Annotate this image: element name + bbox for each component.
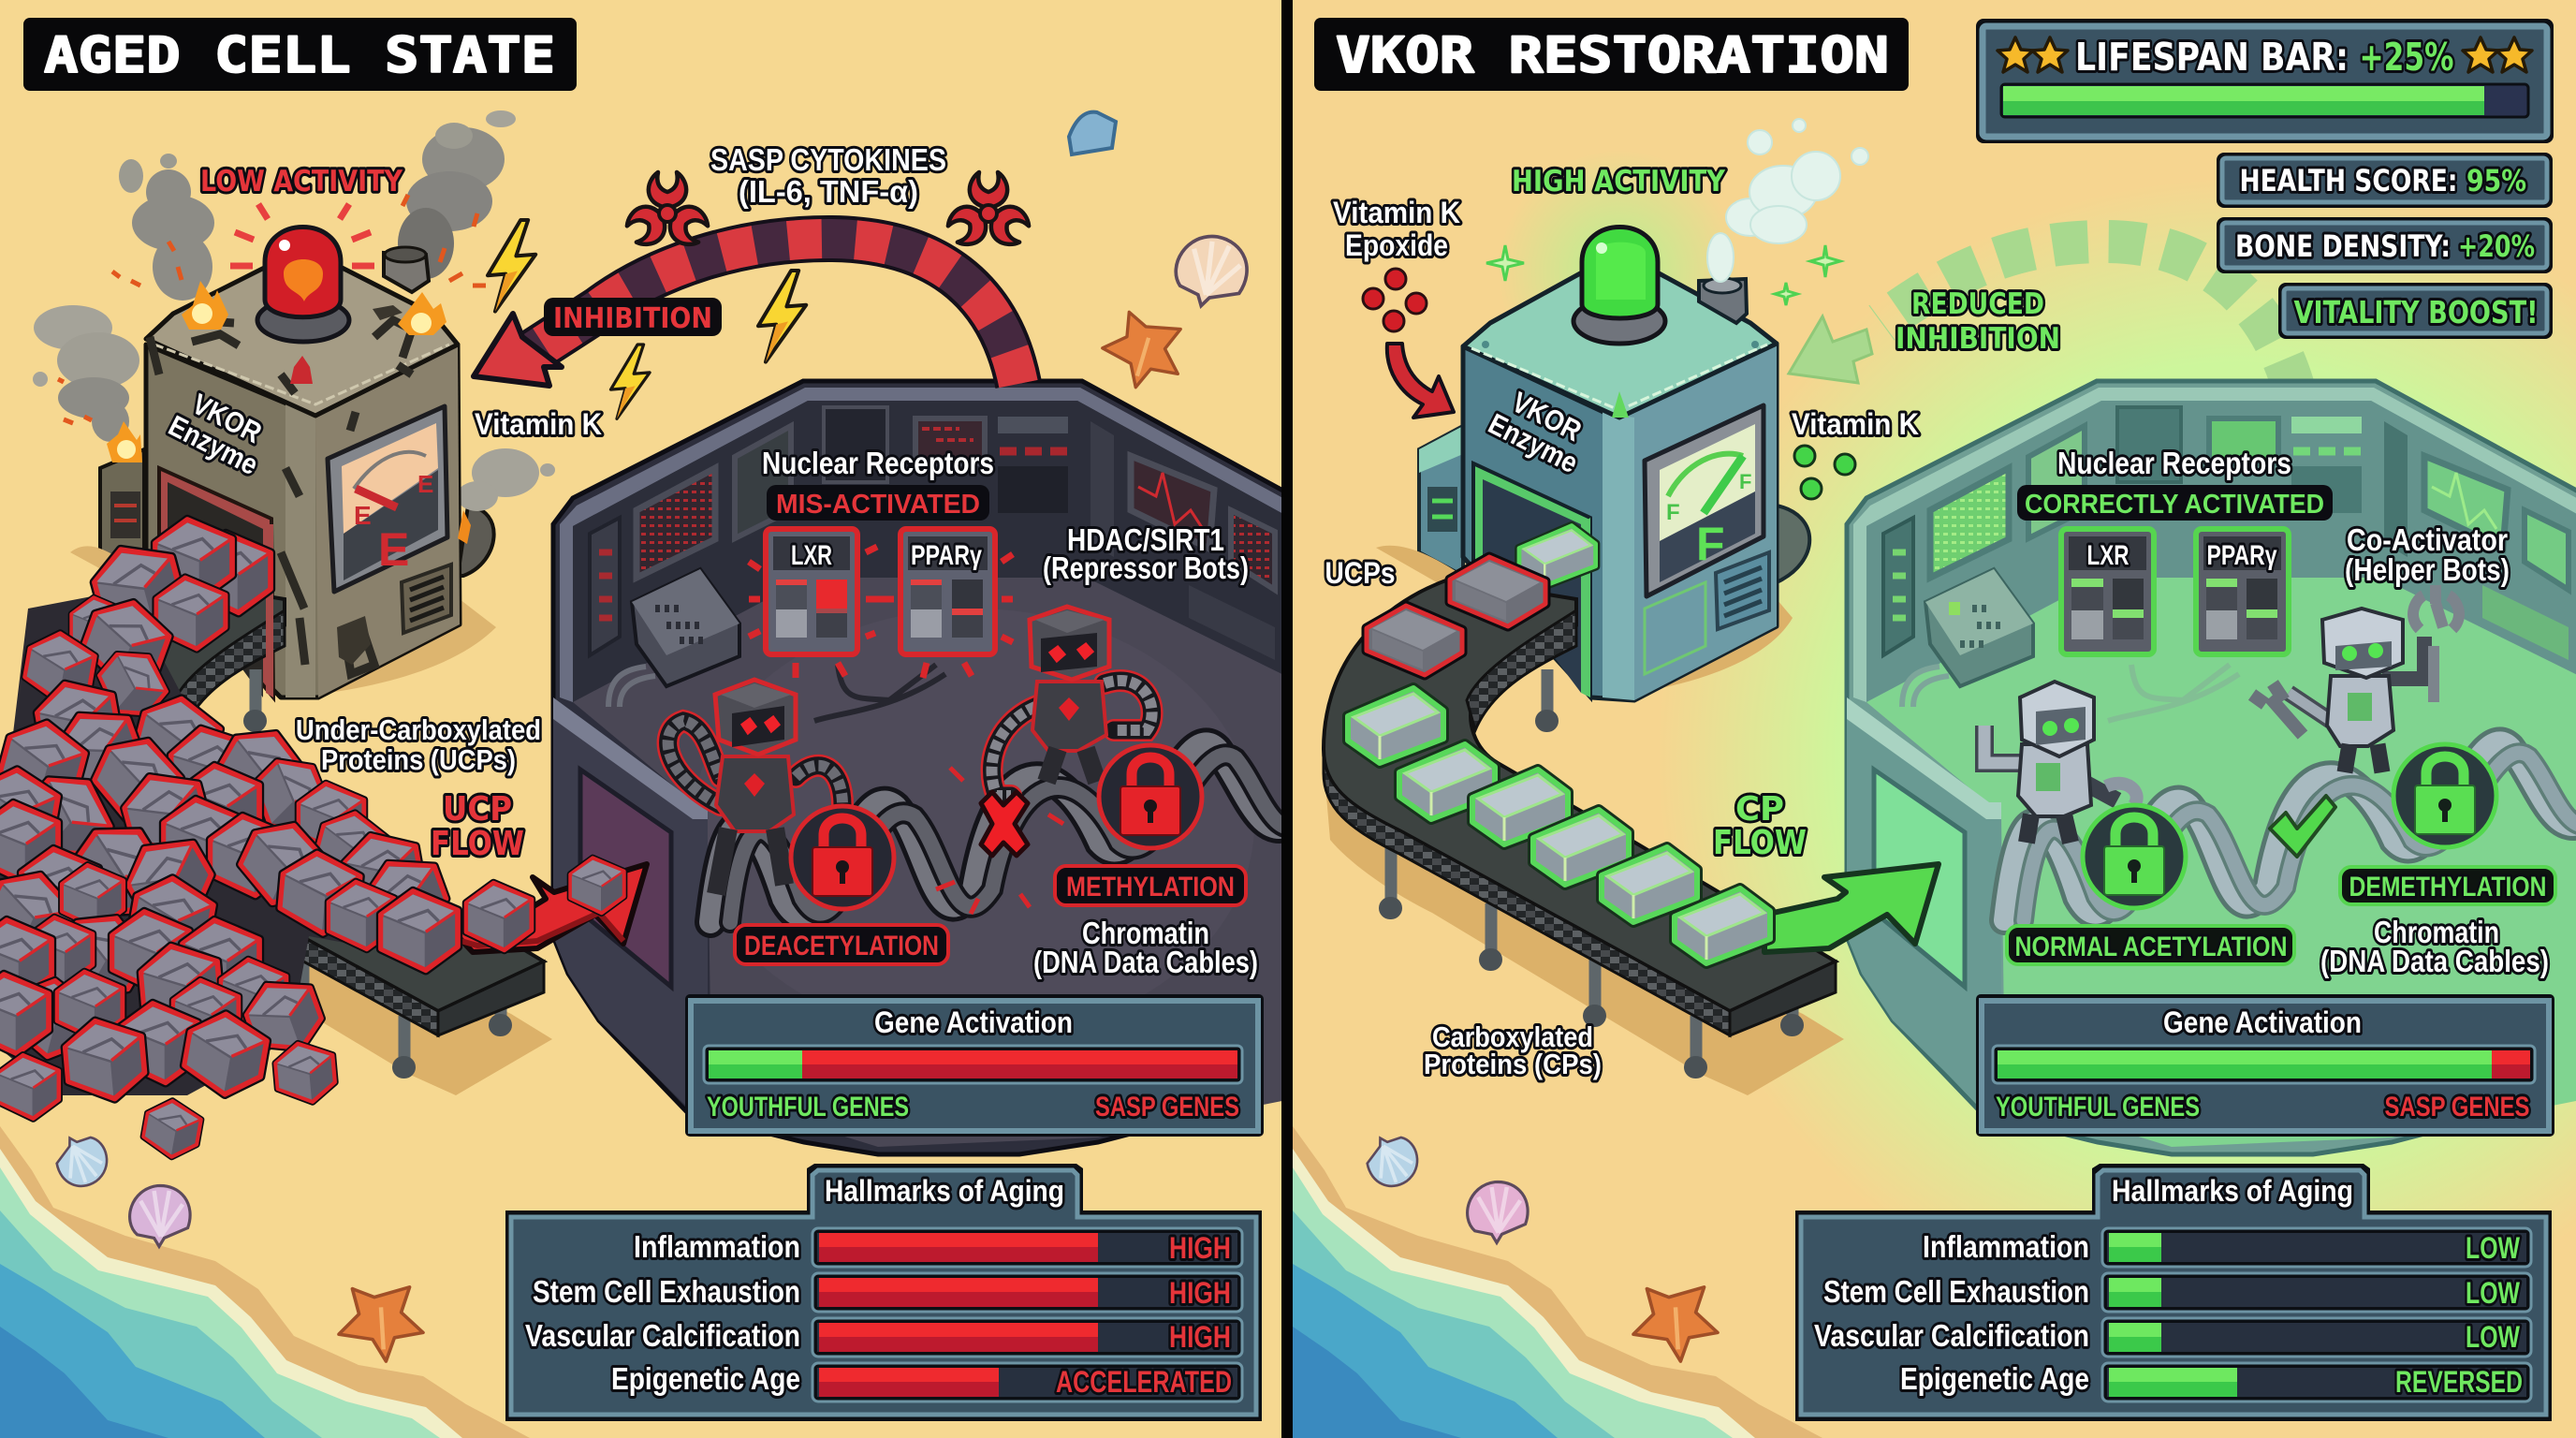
label: HDAC/SIRT1: (Repressor Bots) — [1043, 550, 1249, 585]
icon: check mark — [2270, 796, 2335, 857]
conveyor aged — [32, 579, 552, 1095]
label: reduced inhibition: INHIBITION — [1895, 322, 2060, 356]
stack on aged machine — [384, 247, 429, 292]
helper bot left — [1984, 682, 2137, 843]
label: SASP genes: SASP GENES — [2385, 1092, 2529, 1123]
label: CP flow — [1713, 790, 1807, 862]
icon: lightning 1 — [488, 220, 535, 312]
label: gene activation: Gene Activation — [874, 1005, 1073, 1039]
row: inflammation — [634, 1228, 1242, 1267]
divider — [1281, 0, 1293, 1438]
panel: hallmarks healthy — [1795, 1164, 2552, 1421]
badge: methylation — [1055, 866, 1246, 905]
shoreline left — [0, 1126, 530, 1438]
row: stem cell exhaustion: HIGH — [1169, 1276, 1231, 1310]
beacon glow — [1488, 140, 1750, 403]
vent — [1716, 552, 1769, 629]
gauge — [328, 406, 447, 592]
label: vitamin K epoxide: Vitamin K — [1333, 196, 1460, 229]
badge: mis-activated: MIS-ACTIVATED — [776, 490, 980, 520]
label: PPARy: PPARγ — [911, 540, 982, 571]
label: VKOR enzyme: Enzyme — [164, 409, 263, 481]
label: hallmarks title: Hallmarks of Aging — [825, 1174, 1064, 1208]
label: chromatin: (DNA Data Cables) — [1033, 945, 1258, 979]
panel: aged cell room — [553, 381, 1310, 1154]
panel: health score: HEALTH SCORE: — [2239, 163, 2458, 198]
row: stem cell exhaustion: Stem Cell Exhaustion — [533, 1274, 800, 1309]
label: LXR: LXR — [2087, 540, 2130, 571]
icon: beacon red — [230, 204, 374, 342]
arrow: CP flow — [1764, 864, 1939, 952]
label: vitamin K epoxide: Epoxide — [1345, 228, 1448, 262]
label: co-activator: (Helper Bots) — [2345, 552, 2510, 587]
label: carboxylated proteins — [1424, 1020, 1602, 1080]
wall screens — [590, 407, 1275, 660]
label: lifespan bar: LIFESPAN BAR: — [2075, 35, 2349, 80]
icon: starfish right — [1633, 1287, 1718, 1361]
machine: healthy VKOR enzyme: F — [1696, 518, 1725, 570]
row: inflammation: HIGH — [1169, 1231, 1231, 1265]
icon: pink shell right — [1468, 1181, 1528, 1242]
icon: epoxide dots — [1363, 269, 1427, 331]
row: vascular calcification: Vascular Calcification — [1814, 1318, 2089, 1353]
carboxylated box — [1675, 888, 1770, 963]
label: VKOR enzyme right: VKOR — [1507, 386, 1587, 448]
label: high activity: HIGH ACTIVITY — [1512, 165, 1725, 198]
machine: aged VKOR enzyme: E — [378, 523, 409, 576]
machine: aged VKOR enzyme — [146, 248, 460, 697]
label: VKOR enzyme: VKOR — [187, 388, 267, 449]
label: CP flow: CP — [1735, 790, 1784, 829]
title: aged cell state: AGED CELL STATE — [44, 27, 555, 84]
arrow: reduced inhibition dashed arc — [1789, 242, 2295, 393]
row: vascular calcification: HIGH — [1169, 1320, 1231, 1354]
icon: biohazard left — [622, 172, 712, 250]
badge: normal acetylation: NORMAL ACETYLATION — [2014, 932, 2288, 962]
label: UCP flow: UCP — [443, 790, 512, 829]
label: youthful genes: YOUTHFUL GENES — [707, 1092, 909, 1123]
smoke aged machine — [33, 110, 555, 511]
row: epigenetic age: REVERSED — [2395, 1365, 2523, 1399]
badge: inhibition: INHIBITION — [553, 302, 712, 335]
title: aged cell state — [23, 18, 577, 91]
label: reduced inhibition: REDUCED — [1911, 287, 2044, 321]
label: HDAC/SIRT1 — [1043, 522, 1249, 585]
label: chromatin right — [2320, 915, 2549, 978]
front wall with screen — [1847, 697, 2001, 1112]
icon: lightning 3 — [610, 345, 650, 418]
badge: correctly activated: CORRECTLY ACTIVATED — [2025, 490, 2324, 520]
shoreline right — [1293, 1126, 1822, 1438]
label: reduced inhibition — [1895, 287, 2060, 356]
icon: beacon green — [1573, 227, 1665, 344]
switch LXR healthy — [2061, 529, 2154, 654]
machine: healthy VKOR enzyme: F — [1739, 470, 1751, 493]
arrow: SASP cytokine inhibition — [474, 239, 1018, 386]
machine: aged VKOR enzyme: E — [417, 470, 433, 498]
row: epigenetic age — [1900, 1361, 2531, 1401]
repressor bot right — [992, 607, 1152, 796]
panel: bone density — [2217, 217, 2553, 273]
label: SASP cytokines — [710, 142, 946, 209]
panel: VKOR restoration background — [1281, 0, 2576, 1438]
label: under-carboxylated proteins — [296, 713, 541, 776]
label: under-carboxylated proteins: Proteins (UCPs) — [321, 743, 516, 776]
stack healthy — [1699, 278, 1747, 323]
panel: bone density: +20% — [2458, 228, 2535, 264]
row: inflammation: LOW — [2466, 1231, 2521, 1265]
label: gene activation: Gene Activation — [2163, 1005, 2362, 1039]
label: chromatin right: Chromatin — [2374, 915, 2499, 949]
gauge — [1645, 405, 1764, 596]
label: carboxylated proteins: Proteins (CPs) — [1424, 1048, 1602, 1080]
label: youthful genes: YOUTHFUL GENES — [1996, 1092, 2200, 1123]
door — [159, 468, 273, 697]
row: epigenetic age: ACCELERATED — [1056, 1365, 1232, 1399]
icon: lock normal acetylation — [2083, 805, 2186, 908]
row: epigenetic age: Epigenetic Age — [611, 1361, 800, 1396]
panel: gene activation aged — [685, 994, 1264, 1137]
vent — [402, 565, 451, 633]
label: UCPs: UCPs — [1325, 556, 1395, 590]
row: stem cell exhaustion: Stem Cell Exhaustion — [1823, 1274, 2089, 1309]
icon: pink shell — [130, 1185, 190, 1246]
row: vascular calcification: Vascular Calcification — [525, 1318, 800, 1353]
label: SASP cytokines: (IL-6, TNF-α) — [739, 174, 918, 209]
label: carboxylated proteins: Carboxylated — [1432, 1020, 1593, 1053]
label: CP flow: FLOW — [1713, 824, 1807, 862]
badge: normal acetylation — [2007, 926, 2294, 964]
icon: cream shell — [1168, 228, 1254, 315]
panel: healthy room — [1847, 381, 2576, 1154]
icon: biohazard right — [944, 172, 1033, 250]
panel: vitality boost — [2278, 283, 2553, 339]
protein boxes — [1348, 526, 1697, 922]
title: VKOR restoration — [1314, 18, 1909, 91]
label: SASP cytokines: SASP CYTOKINES — [710, 142, 946, 177]
row: inflammation: Inflammation — [634, 1229, 800, 1264]
row: vascular calcification — [525, 1318, 1242, 1357]
fire and sparks — [58, 195, 486, 544]
front wall with screen — [553, 697, 708, 1112]
label: co-activator — [2345, 522, 2510, 587]
row: vascular calcification: LOW — [2466, 1320, 2521, 1354]
label: UCP flow — [431, 790, 524, 863]
label: vitamin K right: Vitamin K — [1792, 407, 1919, 441]
icon: blue shell lower — [48, 1126, 116, 1195]
console — [608, 569, 739, 707]
icon: broken X — [936, 768, 1075, 914]
label: vitamin K: Vitamin K — [475, 407, 602, 441]
label: nuclear receptors: Nuclear Receptors — [762, 446, 994, 480]
panel: bone density: BONE DENSITY: — [2235, 228, 2451, 264]
arrow: UCP flow — [445, 864, 647, 952]
label: VKOR enzyme right — [1484, 380, 1597, 479]
label: hallmarks title: Hallmarks of Aging — [2112, 1174, 2353, 1208]
value: +25%: +25% — [2359, 35, 2454, 80]
label: SASP genes: SASP GENES — [1095, 1092, 1239, 1123]
green glow — [1591, 140, 2576, 1357]
icon: lock methylation — [1099, 745, 1202, 848]
pile of under-carboxylated proteins — [0, 520, 624, 1161]
machine: healthy VKOR enzyme: F — [1666, 500, 1680, 525]
row: epigenetic age: Epigenetic Age — [1900, 1361, 2089, 1396]
conveyor healthy — [1324, 579, 1844, 1095]
machine: healthy VKOR enzyme — [1463, 252, 1777, 700]
steam — [1707, 119, 1868, 282]
panel: lifespan bar — [1976, 19, 2554, 143]
chromatin DNA cables — [710, 743, 1301, 922]
row: stem cell exhaustion — [533, 1273, 1242, 1312]
switch PPARy healthy — [2196, 529, 2289, 654]
panel: hallmarks aged — [505, 1164, 1262, 1421]
badge: deacetylation: DEACETYLATION — [744, 931, 939, 961]
label: under-carboxylated proteins: Under-Carboxylated — [296, 713, 541, 746]
helper bot right — [2252, 585, 2459, 772]
repressor bot left — [668, 680, 842, 894]
label: PPARy: PPARγ — [2207, 540, 2277, 571]
label: nuclear receptors right: Nuclear Receptors — [2057, 446, 2291, 480]
door — [1473, 463, 1590, 697]
wall screens — [1883, 407, 2569, 660]
icon: lock deacetylation — [791, 806, 894, 909]
row: inflammation — [1923, 1228, 2531, 1267]
label: vitamin K epoxide — [1333, 196, 1460, 262]
icon: blue shell — [1069, 112, 1116, 154]
icon: lightning 2 — [758, 271, 806, 362]
icon: vitamin K dots — [1794, 446, 1855, 499]
label: chromatin — [1033, 916, 1258, 979]
machine: aged VKOR enzyme: E — [354, 501, 372, 530]
label: VKOR enzyme — [164, 382, 277, 481]
label: chromatin: Chromatin — [1082, 916, 1209, 950]
label: LXR: LXR — [791, 540, 832, 571]
panel: health score — [2217, 153, 2553, 208]
sparkles — [1486, 245, 1840, 305]
icon: lock demethylation — [2393, 744, 2496, 847]
icon: starfish top — [1094, 306, 1193, 399]
switch LXR — [766, 529, 857, 654]
arrow: epoxide to enzyme — [1387, 344, 1454, 418]
badge: methylation: METHYLATION — [1066, 872, 1235, 902]
panel: gene activation healthy — [1976, 994, 2554, 1137]
label: low activity: LOW ACTIVITY — [200, 165, 402, 198]
row: vascular calcification — [1814, 1318, 2531, 1357]
badge: deacetylation — [735, 925, 948, 964]
title: VKOR restoration: VKOR RESTORATION — [1336, 27, 1889, 84]
label: VKOR enzyme right: Enzyme — [1484, 407, 1583, 479]
label: HDAC/SIRT1: HDAC/SIRT1 — [1067, 522, 1224, 557]
row: epigenetic age — [611, 1361, 1242, 1401]
machine: healthy side box — [1376, 426, 1809, 697]
row: stem cell exhaustion — [1823, 1273, 2531, 1312]
label: co-activator: Co-Activator — [2347, 522, 2508, 557]
panel: aged cell state background — [0, 0, 1281, 1438]
row: inflammation: Inflammation — [1923, 1229, 2089, 1264]
label: UCP flow: FLOW — [431, 825, 524, 863]
console — [1902, 569, 2033, 707]
panel: health score: 95% — [2466, 163, 2526, 198]
icon: blue shell right — [1358, 1126, 1427, 1195]
icon: starfish lower — [339, 1287, 423, 1361]
chromatin DNA cables healthy — [2004, 741, 2576, 920]
row: stem cell exhaustion: LOW — [2466, 1276, 2521, 1310]
machine: side box left — [70, 449, 496, 697]
switch PPARy — [900, 529, 995, 654]
